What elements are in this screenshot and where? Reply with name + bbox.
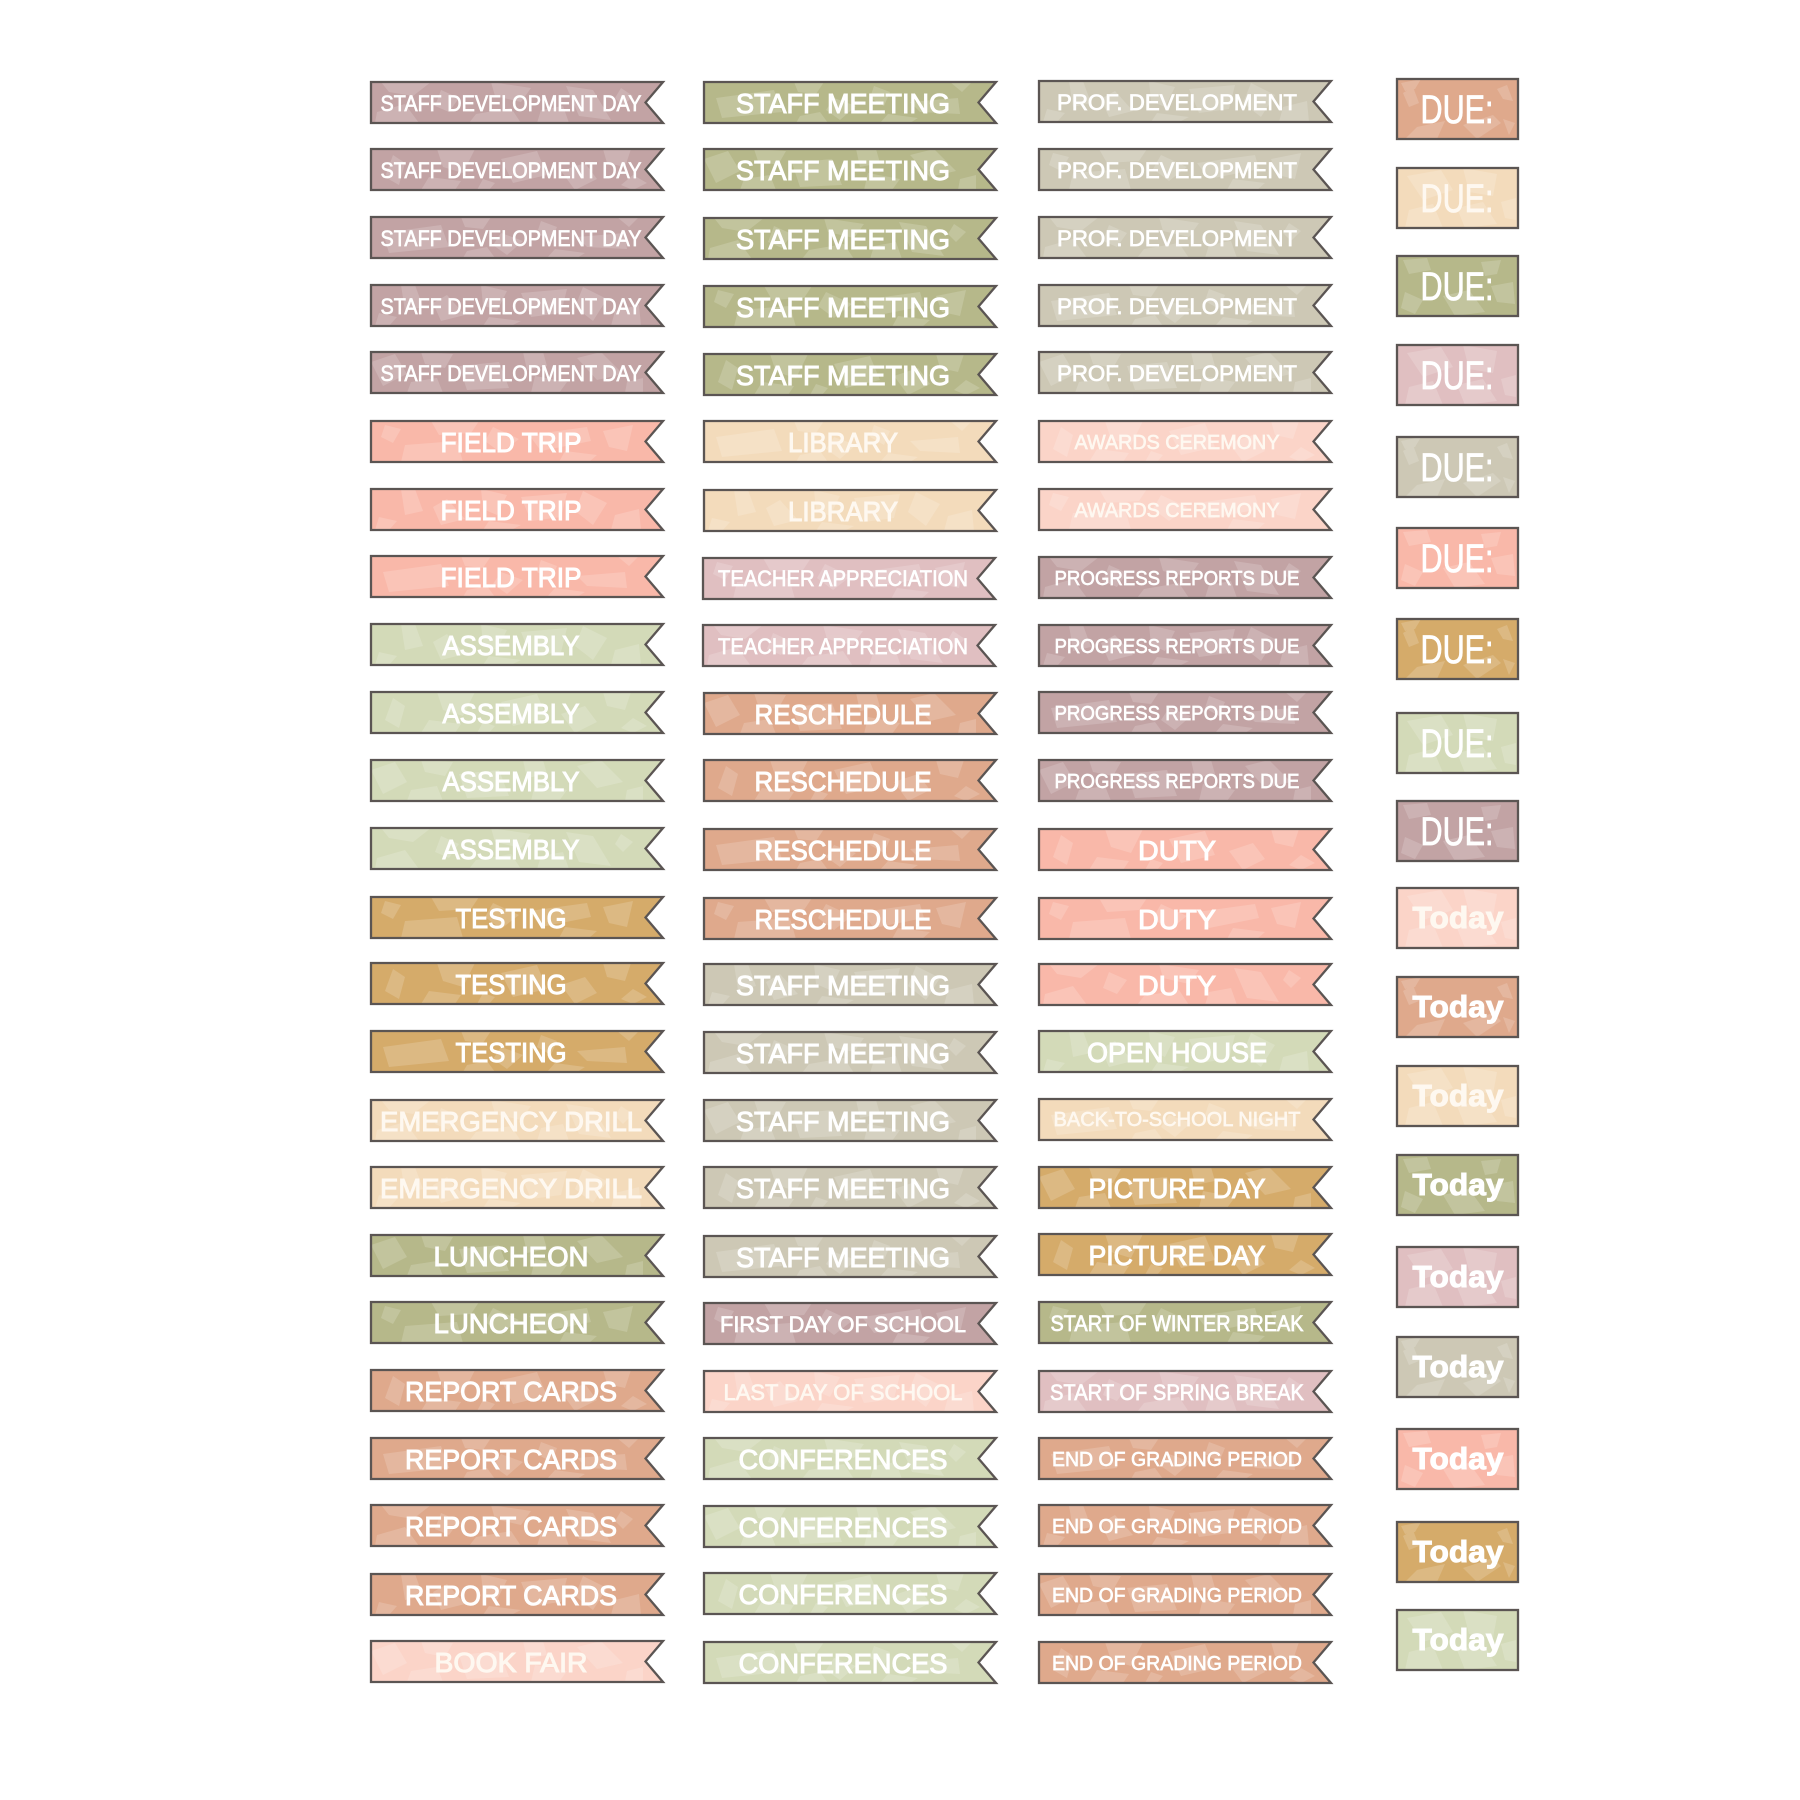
banner: prof. development <box>1039 285 1331 326</box>
banner: reschedule: RESCHEDULE <box>754 766 932 797</box>
label: due light sage <box>1397 713 1518 773</box>
label: today greige <box>1397 1337 1518 1397</box>
banner: testing <box>371 897 663 938</box>
banner: first day of school <box>704 1303 996 1344</box>
banner: end of grading period: END OF GRADING PERIOD <box>1052 1585 1302 1607</box>
banner: staff meeting <box>704 354 996 395</box>
banner: teacher appreciation: TEACHER APPRECIATION <box>718 566 968 591</box>
banner: library: LIBRARY <box>788 496 898 527</box>
banner: prof. development: PROF. DEVELOPMENT <box>1057 361 1297 386</box>
banner: report cards: REPORT CARDS <box>405 1376 617 1407</box>
label: due sage <box>1397 256 1518 316</box>
banner: end of grading period <box>1039 1642 1331 1683</box>
banner: staff meeting <box>704 1100 996 1141</box>
banner: open house: OPEN HOUSE <box>1087 1037 1267 1068</box>
label: today greige: Today <box>1412 1349 1504 1384</box>
banner: staff meeting <box>704 286 996 327</box>
banner: staff meeting: STAFF MEETING <box>736 970 950 1001</box>
banner: duty: DUTY <box>1138 970 1216 1001</box>
banner: prof. development <box>1039 81 1331 122</box>
banner: staff meeting: STAFF MEETING <box>736 1242 950 1273</box>
label: due light sage: DUE: <box>1420 722 1494 766</box>
banner: progress reports due <box>1039 625 1331 666</box>
banner: staff meeting: STAFF MEETING <box>736 88 950 119</box>
banner: progress reports due <box>1039 760 1331 801</box>
banner: staff development day: STAFF DEVELOPMENT DAY <box>380 91 642 116</box>
banner: duty: DUTY <box>1138 904 1216 935</box>
label: due cream <box>1397 168 1518 228</box>
banner: staff development day <box>371 82 663 123</box>
banner: book fair: BOOK FAIR <box>434 1647 588 1678</box>
banner: prof. development <box>1039 352 1331 393</box>
banner: conferences: CONFERENCES <box>738 1579 948 1610</box>
banner: duty <box>1039 964 1331 1005</box>
banner: assembly <box>371 828 663 869</box>
banner: reschedule: RESCHEDULE <box>754 904 932 935</box>
banner: report cards <box>371 1505 663 1546</box>
label: today gold: Today <box>1412 1534 1504 1569</box>
banner: reschedule: RESCHEDULE <box>754 835 932 866</box>
banner: staff meeting <box>704 149 996 190</box>
banner: prof. development: PROF. DEVELOPMENT <box>1057 158 1297 183</box>
banner: teacher appreciation: TEACHER APPRECIATION <box>718 634 968 659</box>
banner: staff meeting: STAFF MEETING <box>736 1038 950 1069</box>
banner: assembly: ASSEMBLY <box>442 766 580 797</box>
banner: duty: DUTY <box>1138 835 1216 866</box>
banner: end of grading period <box>1039 1505 1331 1546</box>
banner: end of grading period: END OF GRADING PERIOD <box>1052 1449 1302 1471</box>
banner: staff development day: STAFF DEVELOPMENT DAY <box>380 158 642 183</box>
label: due gold <box>1397 619 1518 679</box>
banner: back-to-school night <box>1039 1099 1331 1140</box>
banner: staff development day: STAFF DEVELOPMENT DAY <box>380 294 642 319</box>
banner: progress reports due: PROGRESS REPORTS DUE <box>1054 636 1300 658</box>
banner: field trip <box>371 421 663 462</box>
label: due pink <box>1397 345 1518 405</box>
column 4 due and today labels <box>1397 79 1518 1670</box>
banner: assembly: ASSEMBLY <box>442 630 580 661</box>
label: today terracotta <box>1397 977 1518 1037</box>
column 3 banners <box>1039 81 1331 1683</box>
banner: staff meeting: STAFF MEETING <box>736 1106 950 1137</box>
banner: staff development day: STAFF DEVELOPMENT DAY <box>380 361 642 386</box>
banner: testing <box>371 963 663 1004</box>
banner: staff meeting <box>704 1236 996 1277</box>
banner: conferences: CONFERENCES <box>738 1512 948 1543</box>
banner: start of winter break: START OF WINTER BREAK <box>1050 1311 1304 1336</box>
banner: open house <box>1039 1031 1331 1072</box>
banner: report cards: REPORT CARDS <box>405 1511 617 1542</box>
banner: end of grading period: END OF GRADING PERIOD <box>1052 1653 1302 1675</box>
banner: back-to-school night: BACK-TO-SCHOOL NIGHT <box>1054 1109 1300 1131</box>
banner: staff meeting: STAFF MEETING <box>736 224 950 255</box>
banner: conferences <box>704 1642 996 1683</box>
banner: start of winter break <box>1039 1302 1331 1343</box>
banner: staff meeting: STAFF MEETING <box>736 1173 950 1204</box>
banner: prof. development: PROF. DEVELOPMENT <box>1057 294 1297 319</box>
label: today coral: Today <box>1412 1441 1504 1476</box>
banner: progress reports due: PROGRESS REPORTS DUE <box>1054 568 1300 590</box>
banner: field trip <box>371 489 663 530</box>
banner: reschedule <box>704 898 996 939</box>
label: due mauve <box>1397 801 1518 861</box>
label: due cream: DUE: <box>1420 177 1494 221</box>
banner: report cards: REPORT CARDS <box>405 1444 617 1475</box>
banner: awards ceremony: AWARDS CEREMONY <box>1074 500 1280 522</box>
column 1 banners <box>371 82 663 1682</box>
banner: emergency drill: EMERGENCY DRILL <box>380 1106 642 1137</box>
banner: reschedule <box>704 693 996 734</box>
banner: picture day <box>1039 1234 1331 1275</box>
banner: luncheon: LUNCHEON <box>434 1308 588 1339</box>
banner: staff meeting: STAFF MEETING <box>736 292 950 323</box>
label: today sage: Today <box>1412 1167 1504 1202</box>
banner: picture day: PICTURE DAY <box>1088 1173 1266 1204</box>
banner: testing: TESTING <box>456 903 566 934</box>
banner: progress reports due: PROGRESS REPORTS DUE <box>1054 703 1300 725</box>
banner: staff development day <box>371 285 663 326</box>
banner: assembly <box>371 624 663 665</box>
banner: luncheon <box>371 1302 663 1343</box>
banner: luncheon: LUNCHEON <box>434 1241 588 1272</box>
banner: start of spring break <box>1039 1371 1331 1412</box>
banner: emergency drill <box>371 1100 663 1141</box>
banner: prof. development: PROF. DEVELOPMENT <box>1057 90 1297 115</box>
banner: conferences <box>704 1438 996 1479</box>
banner: awards ceremony <box>1039 489 1331 530</box>
banner: report cards <box>371 1370 663 1411</box>
banner: staff development day: STAFF DEVELOPMENT DAY <box>380 226 642 251</box>
banner: staff development day <box>371 149 663 190</box>
banner: field trip: FIELD TRIP <box>440 495 582 526</box>
banner: last day of school <box>704 1371 996 1412</box>
label: due coral: DUE: <box>1420 537 1494 581</box>
label: today sage <box>1397 1155 1518 1215</box>
banner: duty <box>1039 898 1331 939</box>
banner: progress reports due <box>1039 692 1331 733</box>
banner: teacher appreciation <box>703 558 995 599</box>
label: due terracotta <box>1397 79 1518 139</box>
label: due terracotta: DUE: <box>1420 88 1494 132</box>
banner: end of grading period: END OF GRADING PERIOD <box>1052 1516 1302 1538</box>
banner: testing: TESTING <box>456 969 566 1000</box>
label: due gold: DUE: <box>1420 628 1494 672</box>
banner: assembly <box>371 692 663 733</box>
banner: staff meeting: STAFF MEETING <box>736 360 950 391</box>
banner: reschedule <box>704 760 996 801</box>
banner: first day of school: FIRST DAY OF SCHOOL <box>720 1312 966 1337</box>
banner: staff development day <box>371 352 663 393</box>
banner: field trip: FIELD TRIP <box>440 562 582 593</box>
banner: library <box>704 421 996 462</box>
banner: testing <box>371 1031 663 1072</box>
banner: staff development day <box>371 217 663 258</box>
label: today cream <box>1397 1066 1518 1126</box>
banner: staff meeting <box>704 82 996 123</box>
label: due greige <box>1397 437 1518 497</box>
banner: picture day <box>1039 1167 1331 1208</box>
banner: staff meeting <box>704 964 996 1005</box>
banner: reschedule: RESCHEDULE <box>754 699 932 730</box>
banner: awards ceremony <box>1039 421 1331 462</box>
banner: library: LIBRARY <box>788 427 898 458</box>
banner: conferences <box>704 1506 996 1547</box>
label: today cream: Today <box>1412 1078 1504 1113</box>
column 2 banners <box>703 82 996 1683</box>
banner: progress reports due: PROGRESS REPORTS DUE <box>1054 771 1300 793</box>
label: today pink <box>1397 1247 1518 1307</box>
banner: testing: TESTING <box>456 1037 566 1068</box>
banner: staff meeting <box>704 218 996 259</box>
label: today terracotta: Today <box>1412 989 1504 1024</box>
banner: assembly: ASSEMBLY <box>442 698 580 729</box>
label: today pink: Today <box>1412 1259 1504 1294</box>
banner: teacher appreciation <box>703 625 995 666</box>
label: today coral <box>1397 1429 1518 1489</box>
banner: emergency drill: EMERGENCY DRILL <box>380 1173 642 1204</box>
banner: staff meeting <box>704 1167 996 1208</box>
banner: report cards <box>371 1438 663 1479</box>
label: due pink: DUE: <box>1420 354 1494 398</box>
banner: field trip <box>371 556 663 597</box>
banner: library <box>704 490 996 531</box>
banner: picture day: PICTURE DAY <box>1088 1240 1266 1271</box>
banner: staff meeting: STAFF MEETING <box>736 155 950 186</box>
banner: awards ceremony: AWARDS CEREMONY <box>1074 432 1280 454</box>
banner: book fair <box>371 1641 663 1682</box>
banner: progress reports due <box>1039 557 1331 598</box>
banner: staff meeting <box>704 1032 996 1073</box>
banner: luncheon <box>371 1235 663 1276</box>
banner: reschedule <box>704 829 996 870</box>
label: due sage: DUE: <box>1420 265 1494 309</box>
banner: last day of school: LAST DAY OF SCHOOL <box>724 1380 962 1405</box>
banner: emergency drill <box>371 1167 663 1208</box>
label: due mauve: DUE: <box>1420 810 1494 854</box>
banner: report cards <box>371 1574 663 1615</box>
label: due coral <box>1397 528 1518 588</box>
banner: report cards: REPORT CARDS <box>405 1580 617 1611</box>
banner: assembly <box>371 760 663 801</box>
banner: duty <box>1039 829 1331 870</box>
label: today light pink: Today <box>1412 900 1504 935</box>
banner: conferences: CONFERENCES <box>738 1648 948 1679</box>
banner: end of grading period <box>1039 1574 1331 1615</box>
label: due greige: DUE: <box>1420 446 1494 490</box>
banner: assembly: ASSEMBLY <box>442 834 580 865</box>
label: today gold <box>1397 1522 1518 1582</box>
banner: end of grading period <box>1039 1438 1331 1479</box>
label: today light sage: Today <box>1412 1622 1504 1657</box>
banner: prof. development <box>1039 149 1331 190</box>
banner: conferences <box>704 1573 996 1614</box>
banner: prof. development <box>1039 217 1331 258</box>
label: today light pink <box>1397 888 1518 948</box>
label: today light sage <box>1397 1610 1518 1670</box>
banner: start of spring break: START OF SPRING BREAK <box>1050 1380 1304 1405</box>
banner: field trip: FIELD TRIP <box>440 427 582 458</box>
banner: conferences: CONFERENCES <box>738 1444 948 1475</box>
banner: prof. development: PROF. DEVELOPMENT <box>1057 226 1297 251</box>
